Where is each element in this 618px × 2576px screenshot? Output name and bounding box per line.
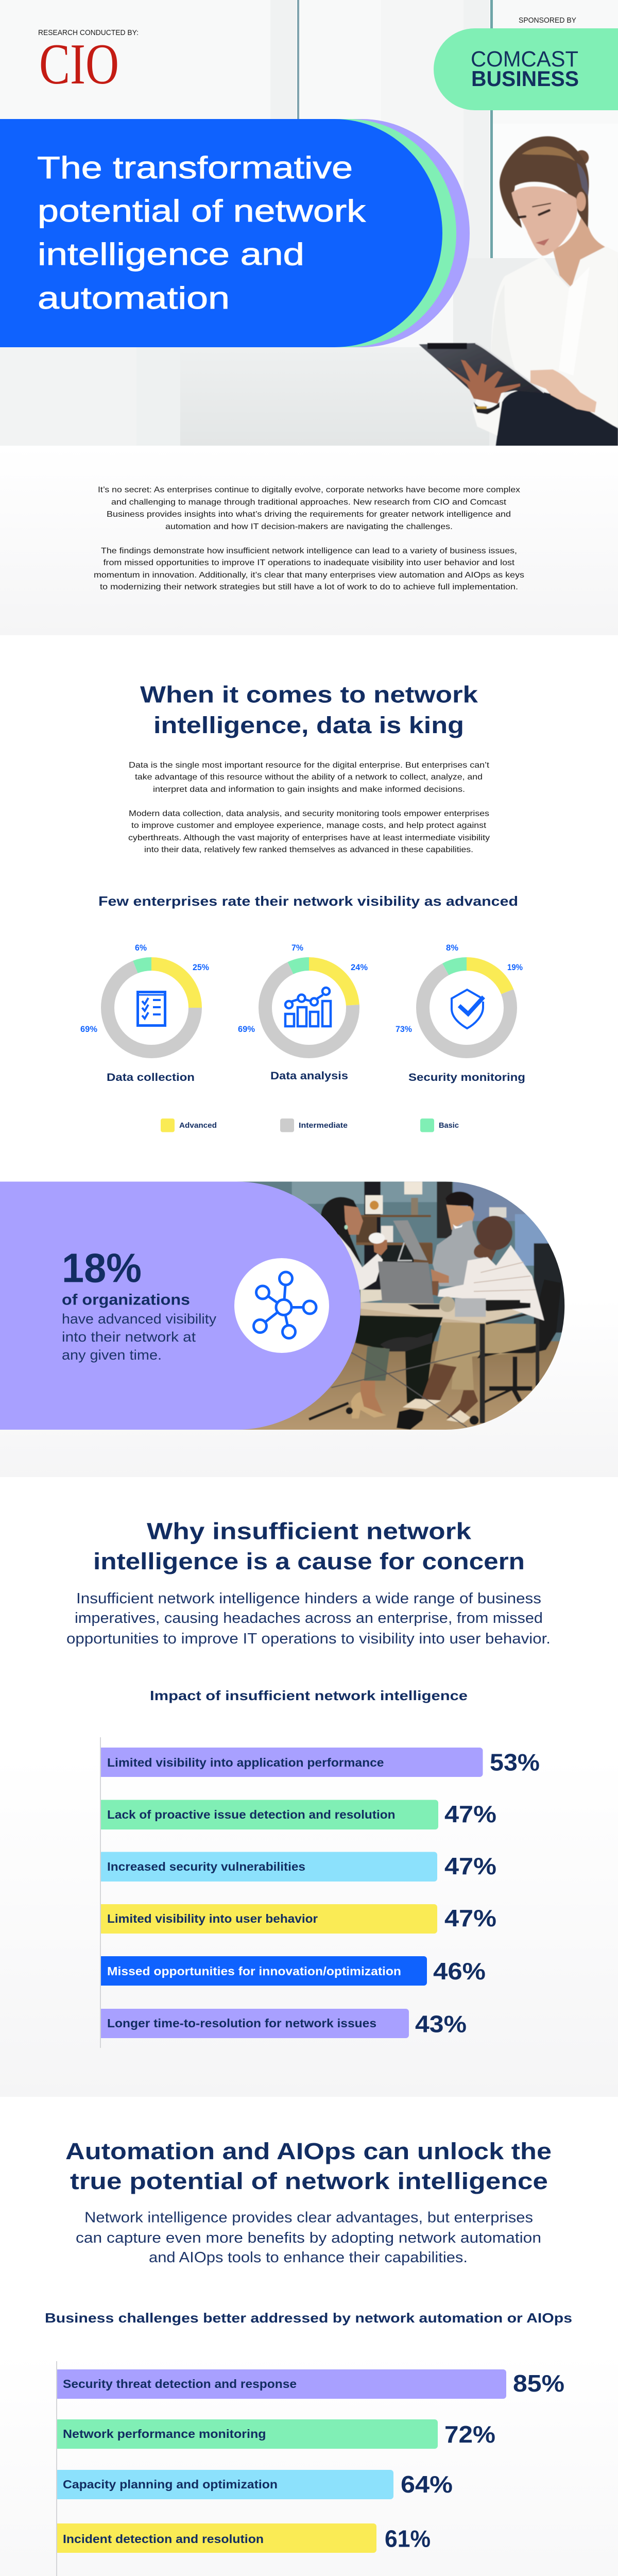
intro text bbox=[94, 485, 524, 591]
bar: innovation: 46% bbox=[433, 1958, 486, 1985]
bar: time to resolution bbox=[101, 2009, 467, 2038]
bar: incident detection bbox=[57, 2523, 431, 2553]
donut: data collection: 25% bbox=[193, 962, 209, 972]
chart title: impact: Impact of insufficient network intelligence bbox=[150, 1688, 468, 1703]
intro text: and challenging to manage through traditional approaches. New research from CIO and Comcast bbox=[111, 498, 507, 507]
text block: automation: can capture even more benefits by adopting network automation bbox=[76, 2230, 541, 2246]
chart title: business challenges: Business challenges better addressed by network automation or AIOps bbox=[45, 2310, 572, 2326]
text block: data is king: into their data, relatively few ranked themselves as advanced in these capabilities. bbox=[144, 845, 473, 854]
text block: concern: imperatives, causing headaches across an enterprise, from missed bbox=[75, 1610, 543, 1626]
stat caption bbox=[62, 1291, 217, 1363]
donut: data analysis: 7% bbox=[291, 943, 303, 953]
hero photo background bbox=[0, 0, 618, 449]
icon: checklist bbox=[138, 992, 165, 1025]
intro text: to modernizing their network strategies but still have a lot of work to do to achieve full implementation. bbox=[100, 583, 518, 591]
bar: network performance: 72% bbox=[444, 2421, 495, 2448]
heading: automation and AIOps: true potential of network intelligence bbox=[70, 2168, 548, 2194]
research credit: RESEARCH CONDUCTED BY: bbox=[38, 28, 139, 37]
text block: data is king: interpret data and information to gain insights and make informed decisions. bbox=[153, 785, 465, 794]
donut: data collection: Data collection bbox=[107, 1072, 195, 1083]
photo: team meeting bbox=[237, 1180, 566, 1434]
bar chart: impact bbox=[100, 1737, 540, 2048]
intro text: momentum in innovation. Additionally, it’s clear that many enterprises view automation and AIOps as keys bbox=[94, 571, 524, 580]
stat caption: into their network at bbox=[62, 1329, 196, 1345]
icon: bar chart with trend bbox=[285, 988, 331, 1026]
heading: data is king: When it comes to network bbox=[140, 681, 478, 708]
heading: data is king: intelligence, data is king bbox=[153, 712, 464, 738]
stat caption: of organizations bbox=[62, 1291, 190, 1309]
sponsor: Comcast Business: COMCAST bbox=[471, 47, 578, 72]
donut: security monitoring: 19% bbox=[507, 962, 523, 972]
donut: data collection: 6% bbox=[135, 943, 147, 953]
bar: user behavior: 47% bbox=[444, 1905, 496, 1931]
bar: proactive issue detection: Lack of proactive issue detection and resolution bbox=[107, 1808, 396, 1821]
heading: cause for concern: Why insufficient network bbox=[147, 1518, 472, 1545]
intro panel bbox=[0, 446, 618, 635]
stat number: 18% bbox=[62, 1245, 142, 1291]
bar: proactive issue detection: 47% bbox=[444, 1801, 496, 1827]
donut: security monitoring bbox=[396, 943, 525, 1083]
text block: data is king: Modern data collection, data analysis, and security monitoring tools empower enterprises bbox=[129, 809, 489, 818]
heading: automation and AIOps: Automation and AIOps can unlock the bbox=[65, 2138, 552, 2164]
section background bbox=[0, 1477, 618, 2097]
intro text: The findings demonstrate how insufficient network intelligence can lead to a variety of business issues, bbox=[101, 547, 517, 555]
text block: data is king: to improve customer and employee experience, manage costs, and help protect against bbox=[131, 821, 487, 830]
legend: Intermediate bbox=[299, 1121, 348, 1130]
section background bbox=[0, 2097, 618, 2576]
intro text: from missed opportunities to improve IT operations to inadequate visibility into user behavior and lost bbox=[103, 558, 515, 567]
heading: cause for concern bbox=[93, 1518, 525, 1574]
donut: security monitoring: 8% bbox=[446, 943, 458, 953]
bar: security vulnerabilities: Increased security vulnerabilities bbox=[107, 1860, 305, 1873]
CIO logo: CIO bbox=[39, 32, 119, 96]
bar: proactive issue detection bbox=[101, 1800, 496, 1829]
stat caption: have advanced visibility bbox=[62, 1311, 217, 1327]
bar: user behavior bbox=[101, 1904, 496, 1934]
donut: data collection bbox=[80, 943, 209, 1083]
title: potential of network bbox=[38, 194, 366, 228]
section background to callout bbox=[0, 1150, 618, 1477]
intro text: automation and how IT decision-makers are navigating the challenges. bbox=[165, 522, 453, 531]
bar: security threat bbox=[57, 2369, 564, 2399]
title bbox=[37, 150, 366, 315]
text block: data is king: cyberthreats. Although the vast majority of enterprises have at least intermediate visibility bbox=[128, 834, 490, 842]
donut: data analysis: 69% bbox=[238, 1024, 255, 1034]
sponsor: Comcast Business: SPONSORED BY bbox=[519, 16, 576, 25]
hero title panel bbox=[0, 119, 470, 347]
section: automation bbox=[45, 2138, 572, 2576]
legend: Advanced bbox=[179, 1121, 217, 1130]
donut: data analysis: Data analysis bbox=[270, 1070, 348, 1082]
bar: application performance: 53% bbox=[490, 1749, 540, 1775]
title: automation bbox=[38, 281, 230, 315]
sponsor: Comcast Business bbox=[434, 16, 618, 110]
legend bbox=[161, 1118, 459, 1132]
text block: data is king: Data is the single most important resource for the digital enterprise. But enterprises can’t bbox=[129, 761, 490, 770]
bar: capacity planning: 64% bbox=[401, 2471, 453, 2498]
heading: automation and AIOps bbox=[65, 2138, 552, 2194]
bar: security threat: Security threat detection and response bbox=[63, 2377, 297, 2391]
bar: capacity planning bbox=[57, 2470, 453, 2499]
intro text: It’s no secret: As enterprises continue to digitally evolve, corporate networks have become more complex bbox=[98, 485, 520, 495]
stat caption: any given time. bbox=[62, 1347, 162, 1363]
heading: cause for concern: intelligence is a cause for concern bbox=[93, 1548, 525, 1574]
bar: security threat: 85% bbox=[513, 2370, 564, 2397]
text block: data is king bbox=[128, 761, 490, 854]
bar: innovation: Missed opportunities for innovation/optimization bbox=[107, 1964, 401, 1978]
text block: data is king: take advantage of this resource without the ability of a network to collect, analyze, and bbox=[135, 773, 483, 782]
bar: time to resolution: Longer time-to-resolution for network issues bbox=[107, 2016, 376, 2030]
text block: concern: Insufficient network intelligence hinders a wide range of business bbox=[76, 1590, 541, 1607]
legend: Basic bbox=[439, 1121, 459, 1130]
donut: data analysis: 24% bbox=[351, 962, 368, 972]
section: data is king bbox=[0, 681, 618, 1477]
bar: time to resolution: 43% bbox=[415, 2010, 467, 2037]
bar: application performance bbox=[101, 1748, 540, 1777]
text block: automation bbox=[76, 2209, 541, 2266]
donut: data analysis bbox=[238, 943, 368, 1082]
text block: concern bbox=[66, 1590, 551, 1647]
bar: security vulnerabilities: 47% bbox=[444, 1853, 496, 1879]
bar chart: business challenges bbox=[56, 2361, 564, 2576]
donut: data collection: 69% bbox=[80, 1024, 97, 1034]
bar: incident detection: Incident detection and resolution bbox=[63, 2532, 264, 2546]
donut: security monitoring: 73% bbox=[396, 1024, 412, 1034]
chart title: visibility: Few enterprises rate their network visibility as advanced bbox=[98, 893, 518, 909]
callout: 18% bbox=[0, 1182, 360, 1430]
donut: security monitoring: Security monitoring bbox=[408, 1072, 525, 1083]
icon: shield check bbox=[452, 990, 484, 1028]
bar: network performance: Network performance monitoring bbox=[63, 2427, 266, 2441]
heading: data is king bbox=[140, 681, 478, 738]
section: hero and intro bbox=[0, 0, 618, 635]
bar: application performance: Limited visibility into application performance bbox=[107, 1756, 384, 1769]
research credit bbox=[38, 28, 139, 96]
bar: incident detection: 61% bbox=[385, 2526, 431, 2552]
text block: concern: opportunities to improve IT operations to visibility into user behavior. bbox=[66, 1631, 551, 1647]
section: why insufficient bbox=[0, 1518, 618, 2097]
bar: network performance bbox=[57, 2419, 495, 2449]
bar: user behavior: Limited visibility into user behavior bbox=[107, 1912, 318, 1925]
photo: woman with tablet bbox=[419, 136, 618, 449]
title: intelligence and bbox=[38, 237, 304, 272]
bar: security vulnerabilities bbox=[101, 1852, 496, 1882]
text block: automation: Network intelligence provides clear advantages, but enterprises bbox=[84, 2209, 533, 2226]
title: The transformative bbox=[37, 150, 353, 185]
intro text: Business provides insights into what’s driving the requirements for greater network intelligence and bbox=[107, 510, 511, 519]
sponsor: Comcast Business: BUSINESS bbox=[471, 66, 579, 91]
bar: innovation bbox=[101, 1956, 486, 1986]
icon: network nodes bbox=[253, 1272, 316, 1338]
bar: capacity planning: Capacity planning and optimization bbox=[63, 2478, 278, 2491]
text block: automation: and AIOps tools to enhance their capabilities. bbox=[149, 2249, 468, 2266]
